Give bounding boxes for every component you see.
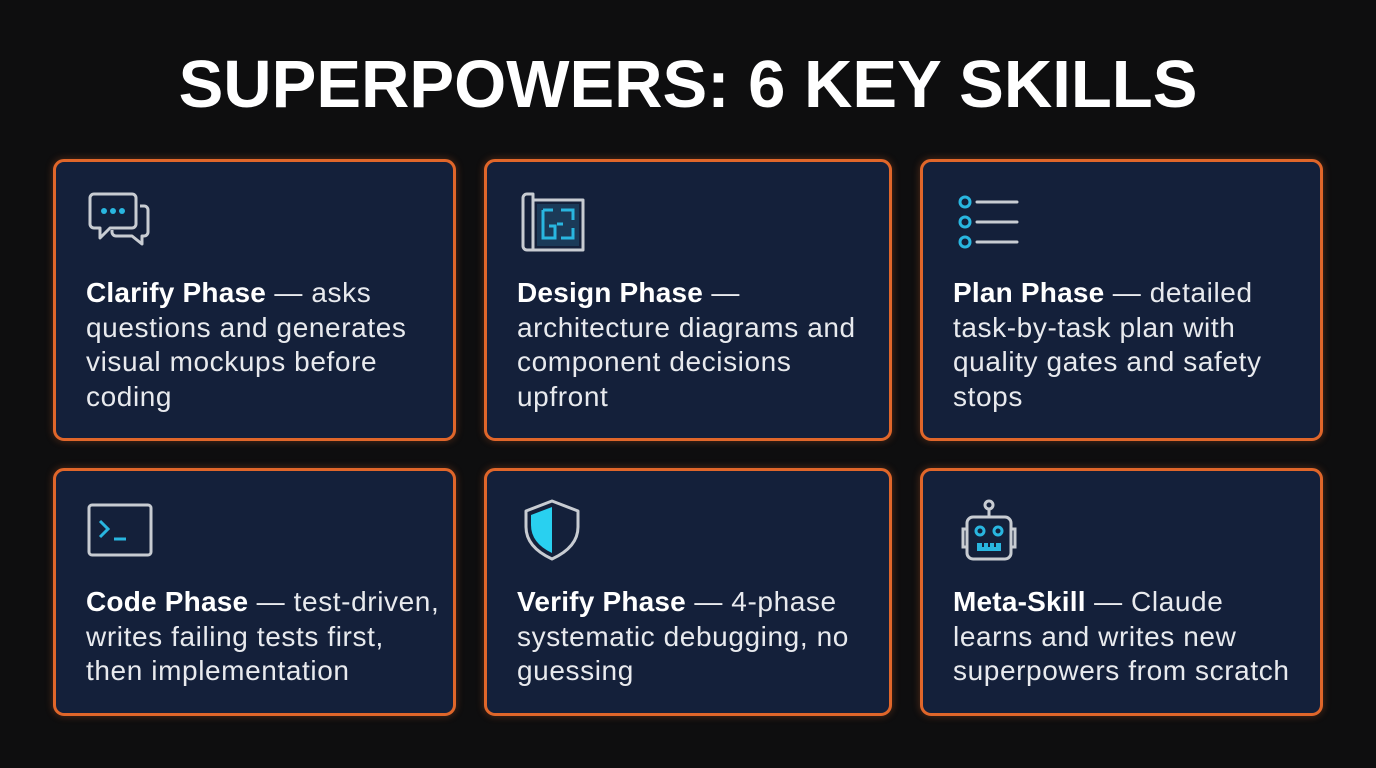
icon: blueprint: [522, 192, 584, 252]
text: clarify: visual mockups before: [86, 346, 377, 377]
icon: terminal: [88, 504, 152, 556]
icon: chat bubbles: [88, 192, 150, 246]
text: plan: quality gates and safety: [953, 346, 1262, 377]
text: design: Design Phase —: [517, 277, 740, 308]
panel: meta-skill: [920, 468, 1323, 716]
panel: clarify: [53, 159, 456, 441]
icon: shield: [524, 500, 580, 560]
text: design: architecture diagrams and: [517, 312, 856, 342]
text: plan: task-by-task plan with: [953, 312, 1235, 342]
text: meta-skill: learns and writes new: [953, 620, 1236, 652]
text: clarify: [86, 277, 406, 412]
icon: robot: [962, 500, 1016, 560]
text: clarify: Clarify Phase — asks: [86, 277, 371, 308]
text: clarify: questions and generates: [86, 312, 406, 342]
text: verify: guessing: [517, 655, 634, 686]
text: code: [86, 586, 439, 686]
text: design: upfront: [517, 380, 608, 412]
text: plan: stops: [953, 380, 1023, 412]
text: clarify: coding: [86, 380, 172, 412]
text: design: component decisions: [517, 346, 791, 377]
text: code: writes failing tests first,: [86, 620, 384, 652]
panel: plan: [920, 159, 1323, 441]
text: meta-skill: [953, 586, 1290, 686]
text: verify: Verify Phase — 4-phase: [517, 586, 837, 617]
text: code: Code Phase — test-driven,: [86, 586, 439, 617]
text: plan: Plan Phase — detailed: [953, 277, 1253, 308]
icon: list: [958, 196, 1018, 248]
text: design: [517, 277, 856, 412]
panel: design: [484, 159, 892, 441]
text: verify: systematic debugging, no: [517, 620, 849, 652]
panel: code: [53, 468, 456, 716]
panel: verify: [484, 468, 892, 716]
text: meta-skill: Meta-Skill — Claude: [953, 586, 1223, 617]
text: meta-skill: superpowers from scratch: [953, 655, 1290, 686]
text: verify: [517, 586, 849, 686]
title: SUPERPOWERS: 6 KEY SKILLS: [179, 47, 1197, 122]
text: code: then implementation: [86, 655, 350, 686]
text: plan: [953, 277, 1262, 412]
